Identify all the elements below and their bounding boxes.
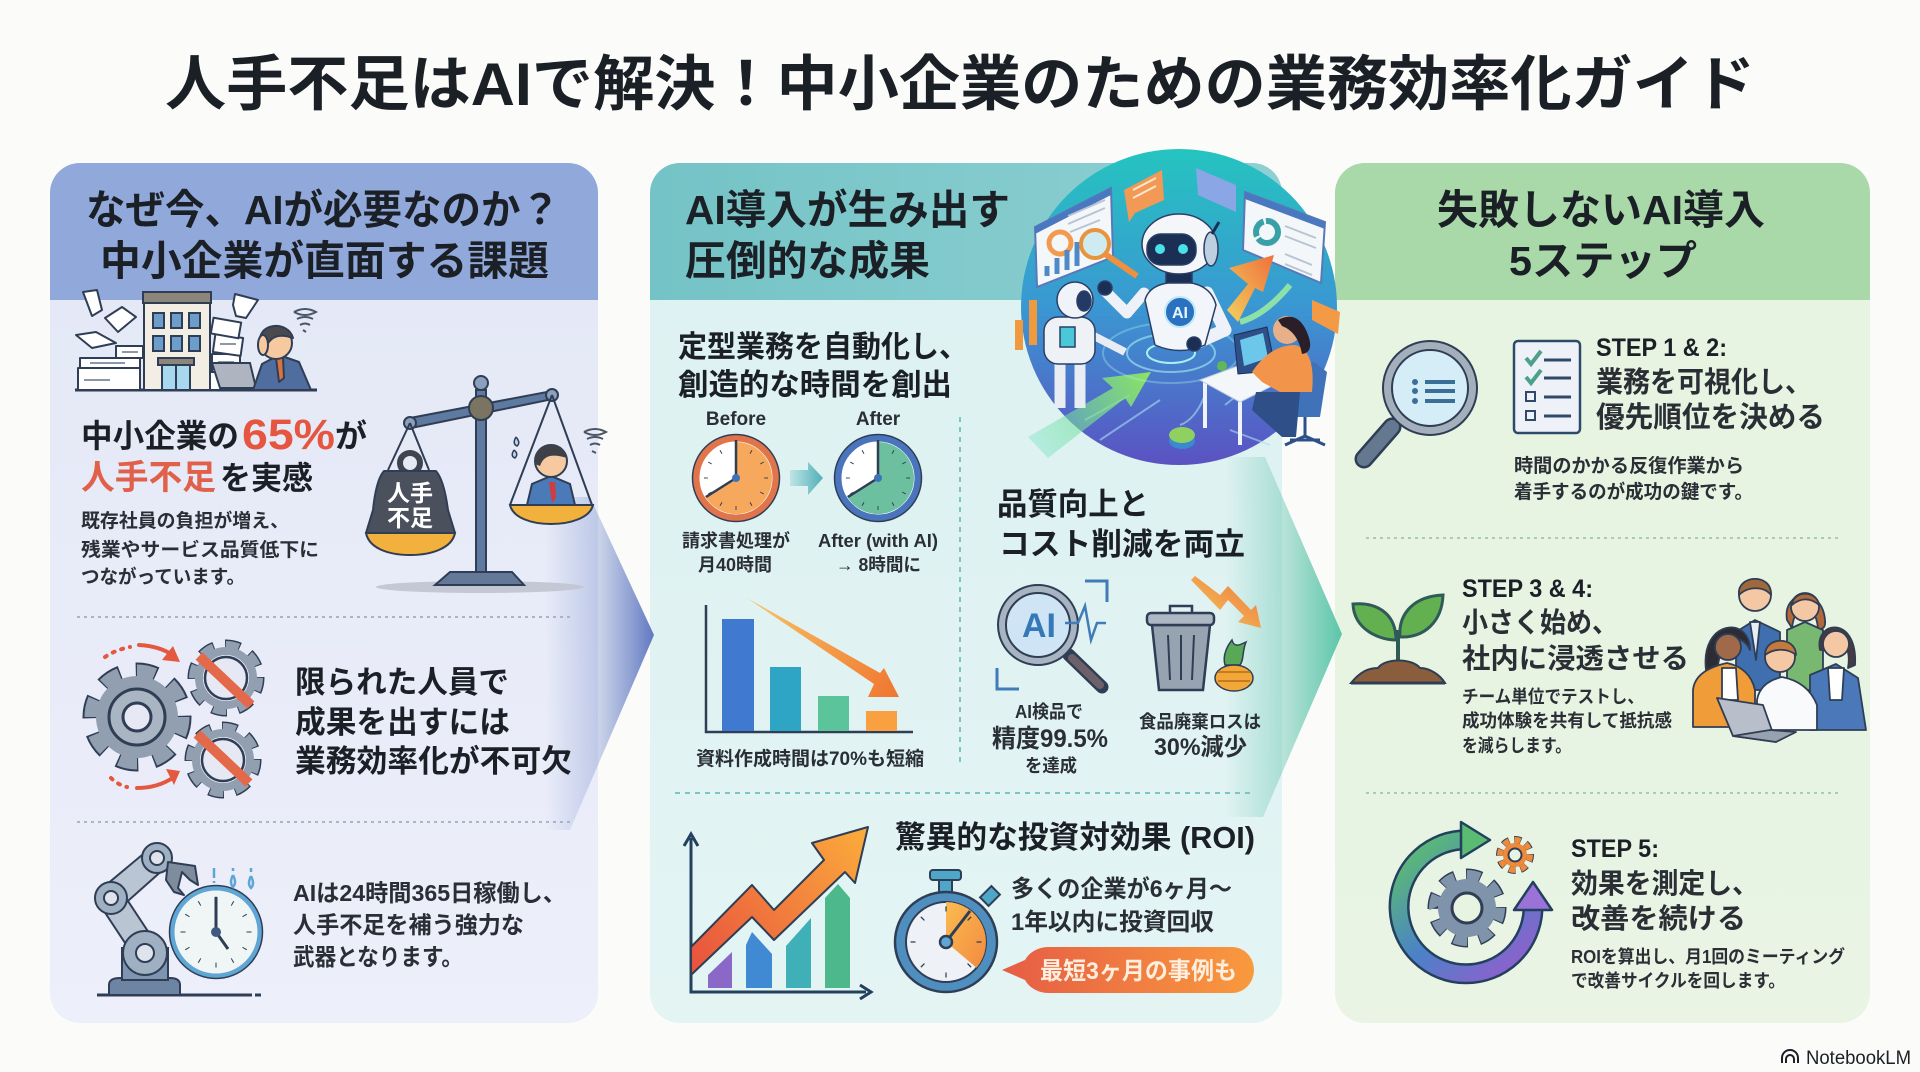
left panel header band xyxy=(50,163,598,300)
arrow: before to after xyxy=(790,462,823,495)
small gear top xyxy=(194,646,258,710)
text: step 1 and 2: STEP 1 & 2: xyxy=(1596,334,1727,362)
right heading: 失敗しないAI導入 xyxy=(1437,187,1765,233)
scale post and beam xyxy=(404,376,558,585)
man in suit xyxy=(1736,620,1780,690)
icon: AI inspection magnifier: AI xyxy=(1022,607,1056,645)
text: payback period: 1年以内に投資回収 xyxy=(1011,909,1214,936)
text: step 5 xyxy=(1571,835,1845,991)
weight labelled labour shortage: 人手 xyxy=(387,480,433,506)
middle heading: 圧倒的な成果 xyxy=(685,238,930,284)
woman in orange jacket xyxy=(1693,663,1755,727)
text: step 5: 効果を測定し、 xyxy=(1571,868,1759,899)
text: AI works around the clock: 武器となります。 xyxy=(293,944,463,970)
text: step 1 and 2 xyxy=(1514,334,1825,503)
text: efficiency is essential: 業務効率化が不可欠 xyxy=(295,744,572,779)
text: food waste reduction: 30%減少 xyxy=(1154,734,1247,761)
panel: results xyxy=(650,163,1282,1023)
panel: why AI now xyxy=(50,163,598,1023)
chart caption: 資料作成時間は70%も短縮 xyxy=(696,747,924,770)
text: step 5: 改善を続ける xyxy=(1571,903,1746,934)
illustration: AI robots orb xyxy=(1019,149,1340,465)
text: AI inspection accuracy: AI検品で xyxy=(1015,702,1083,722)
small green trend arrow xyxy=(1240,285,1290,322)
blue card xyxy=(1196,168,1236,212)
left heading xyxy=(86,187,560,284)
laptop xyxy=(1717,698,1776,742)
small orange gear xyxy=(1500,840,1530,870)
stat: 65 percent feel labor shortage: を実感 xyxy=(220,460,313,496)
worried man xyxy=(253,326,311,390)
right heading: 5ステップ xyxy=(1509,238,1697,284)
worried worker in pan xyxy=(510,395,606,524)
right dashboard xyxy=(1243,192,1325,283)
arm links xyxy=(95,843,198,975)
big orange arrow xyxy=(1227,255,1274,322)
icon: magnifier with list xyxy=(1364,341,1477,459)
text: step 1 and 2: 優先順位を決める xyxy=(1596,401,1825,434)
text: quality and cost: コスト削減を両立 xyxy=(999,527,1245,562)
text: step 5: STEP 5: xyxy=(1571,835,1659,863)
left dashboard xyxy=(1035,188,1137,287)
text: burden on existing staff: 既存社員の負担が増え、 xyxy=(81,509,289,532)
text: step 3 and 4: STEP 3 & 4: xyxy=(1462,575,1593,603)
left heading: なぜ今、AIが必要なのか？ xyxy=(86,187,560,233)
right panel header band xyxy=(1335,163,1870,300)
icon: overworked office scene xyxy=(75,290,317,390)
icon: robot arm and clock xyxy=(95,843,262,995)
weight labelled labour shortage: 不足 xyxy=(387,505,433,531)
stat: 65 percent feel labor shortage: 中小企業の xyxy=(81,418,239,454)
left heading: 中小企業が直面する課題 xyxy=(100,238,549,284)
icon: checklist xyxy=(1514,341,1580,433)
orange chat bubble xyxy=(1124,170,1164,222)
text: AI works around the clock: 人手不足を補う強力な xyxy=(293,912,524,938)
text: efficiency is essential: 限られた人員で xyxy=(295,665,509,700)
text: efficiency is essential xyxy=(295,665,572,779)
text: invoice processing before xyxy=(682,530,790,575)
text: step 5: ROIを算出し、月1回のミーティング xyxy=(1571,946,1845,967)
icon: improvement cycle xyxy=(1399,822,1552,974)
main AI robot: AI xyxy=(1172,305,1188,322)
orange sign xyxy=(1312,300,1340,334)
text: invoice processing after: After (with AI) xyxy=(818,531,938,551)
middle heading: AI導入が生み出す xyxy=(685,187,1010,233)
stat: 65 percent feel labor shortage xyxy=(81,411,367,497)
middle panel header band xyxy=(650,163,1282,300)
callout: as short as three months xyxy=(1002,947,1254,993)
papers flying and stacked xyxy=(76,290,258,390)
title: 人手不足はAIで解決！中小企業のための業務効率化ガイド xyxy=(165,51,1755,118)
text: food waste reduction: 食品廃棄ロスは xyxy=(1139,712,1261,732)
food scrap xyxy=(1224,640,1246,665)
weight labelled labour shortage xyxy=(366,423,455,555)
text: payback period xyxy=(1011,875,1232,936)
main AI robot xyxy=(1098,214,1225,351)
callout: as short as three months: 最短3ヶ月の事例も xyxy=(1040,958,1237,985)
falling arrow xyxy=(1191,576,1261,628)
text: AI inspection accuracy xyxy=(992,702,1108,776)
icon: stopwatch xyxy=(895,870,1000,992)
arrow: left to middle chevron xyxy=(545,497,654,830)
icon: gears stopped by red bars xyxy=(91,645,258,792)
clock: before xyxy=(692,409,780,522)
text: step 3 and 4: 小さく始め、 xyxy=(1462,607,1618,638)
text: quality and cost xyxy=(997,487,1245,562)
stat: 65 percent feel labor shortage: が xyxy=(335,418,367,454)
drops xyxy=(214,868,253,888)
text: ROI heading: 驚異的な投資対効果 (ROI) xyxy=(895,820,1255,855)
icon: AI inspection magnifier xyxy=(997,581,1107,689)
rippled floor rings xyxy=(1103,323,1239,383)
text: food waste reduction xyxy=(1139,712,1261,761)
icon: balance scale xyxy=(366,376,606,593)
clock face xyxy=(170,886,262,978)
text: AI inspection accuracy: 精度99.5% xyxy=(992,725,1108,753)
laptop xyxy=(212,363,256,388)
text: step 3 and 4: 社内に浸透させる xyxy=(1462,643,1689,674)
stat: 65 percent feel labor shortage: 65% xyxy=(242,411,335,459)
text: invoice processing after xyxy=(818,531,938,575)
clock: after xyxy=(834,409,922,522)
left bars xyxy=(1019,300,1033,350)
text: burden on existing staff xyxy=(81,509,319,588)
text: AI works around the clock xyxy=(293,880,566,970)
arrow: middle to right chevron xyxy=(1225,457,1342,817)
text: step 3 and 4: を減らします。 xyxy=(1462,735,1571,756)
red rotation arrows xyxy=(105,645,174,788)
text: step 1 and 2: 業務を可視化し、 xyxy=(1596,366,1812,399)
text: automate routine work: 創造的な時間を創出 xyxy=(678,369,952,402)
text: quality and cost: 品質向上と xyxy=(997,487,1149,522)
text: invoice processing before: 月40時間 xyxy=(698,555,772,575)
dashed dividers xyxy=(77,417,1842,822)
floor lines xyxy=(1085,385,1270,445)
desk and person xyxy=(1200,316,1327,445)
text: step 3 and 4: 成功体験を共有して抵抗感 xyxy=(1462,710,1672,731)
text: step 3 and 4 xyxy=(1462,575,1689,756)
text: step 3 and 4: チーム単位でテストし、 xyxy=(1462,686,1644,707)
text: step 1 and 2: 時間のかかる反復作業から xyxy=(1514,455,1744,477)
text: step 5: で改善サイクルを回します。 xyxy=(1571,971,1785,991)
stat: 65 percent feel labor shortage: 人手不足 xyxy=(81,459,216,497)
NotebookLM logo: NotebookLM xyxy=(1806,1048,1911,1069)
big green arrow xyxy=(1028,372,1151,458)
green button on floor xyxy=(1169,427,1195,449)
woman in green xyxy=(1787,622,1823,690)
right heading xyxy=(1437,187,1765,284)
text: burden on existing staff: 残業やサービス品質低下に xyxy=(81,538,319,561)
red strike bars xyxy=(197,656,251,783)
middle heading xyxy=(685,187,1010,284)
office building xyxy=(143,292,211,390)
small robot xyxy=(1044,282,1125,408)
large gear xyxy=(91,671,183,763)
text: step 1 and 2: 着手するのが成功の鍵です。 xyxy=(1514,480,1753,503)
text: AI inspection accuracy: を達成 xyxy=(1025,755,1077,776)
text: invoice processing after: → 8時間に xyxy=(836,555,921,575)
text: AI works around the clock: AIは24時間365日稼働し、 xyxy=(293,880,566,906)
text: payback period: 多くの企業が6ヶ月〜 xyxy=(1011,875,1232,903)
chart: ROI growth xyxy=(684,827,871,999)
panel: five steps xyxy=(1335,163,1870,1023)
text: automate routine work xyxy=(678,331,968,402)
small gear bottom xyxy=(191,728,255,792)
center gear xyxy=(1434,875,1500,941)
stress swirl xyxy=(294,309,316,332)
bar chart: document time reduction xyxy=(696,598,924,770)
text: automate routine work: 定型業務を自動化し、 xyxy=(678,331,968,364)
text: invoice processing before: 請求書処理が xyxy=(682,530,790,551)
clock: before: Before xyxy=(706,409,766,430)
illustration: team around laptop xyxy=(1693,579,1866,742)
icon: trash can and food xyxy=(1147,576,1261,691)
man in white shirt xyxy=(1757,677,1817,730)
text: burden on existing staff: つながっています。 xyxy=(81,565,245,588)
woman in blue jacket xyxy=(1810,664,1866,730)
icon: sprout xyxy=(1351,595,1445,683)
text: efficiency is essential: 成果を出すには xyxy=(295,705,510,740)
clock: after: After xyxy=(856,409,901,430)
